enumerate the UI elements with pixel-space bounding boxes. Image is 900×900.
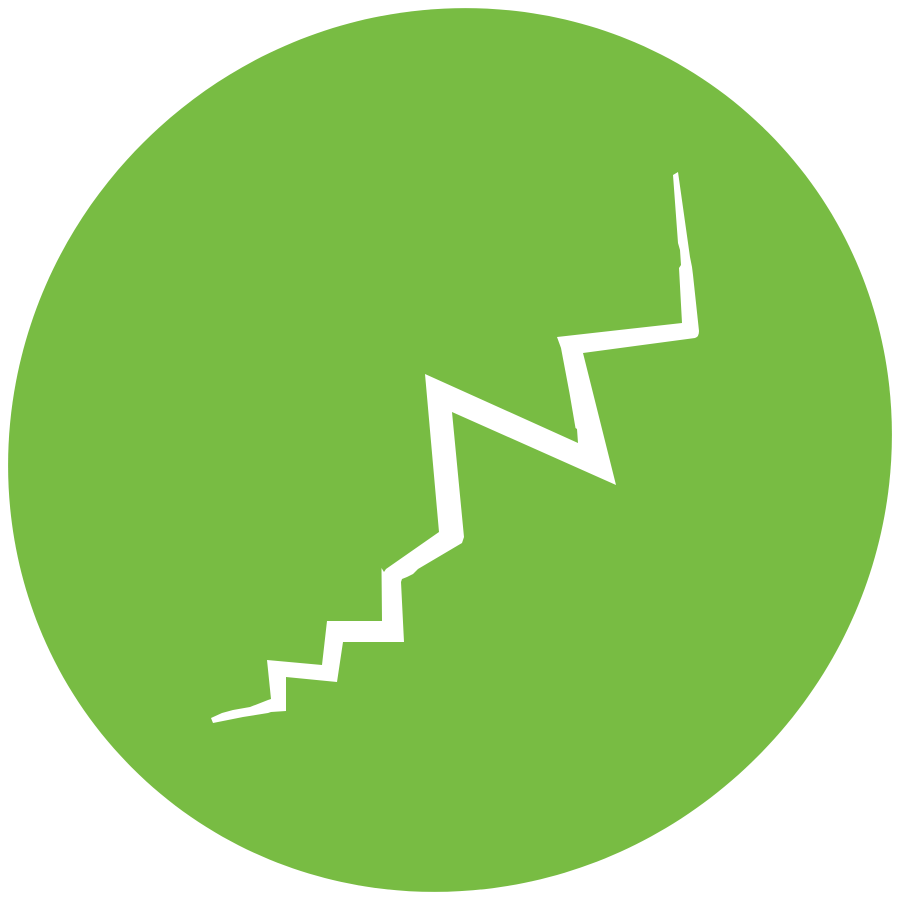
white jagged crack	[211, 172, 699, 723]
